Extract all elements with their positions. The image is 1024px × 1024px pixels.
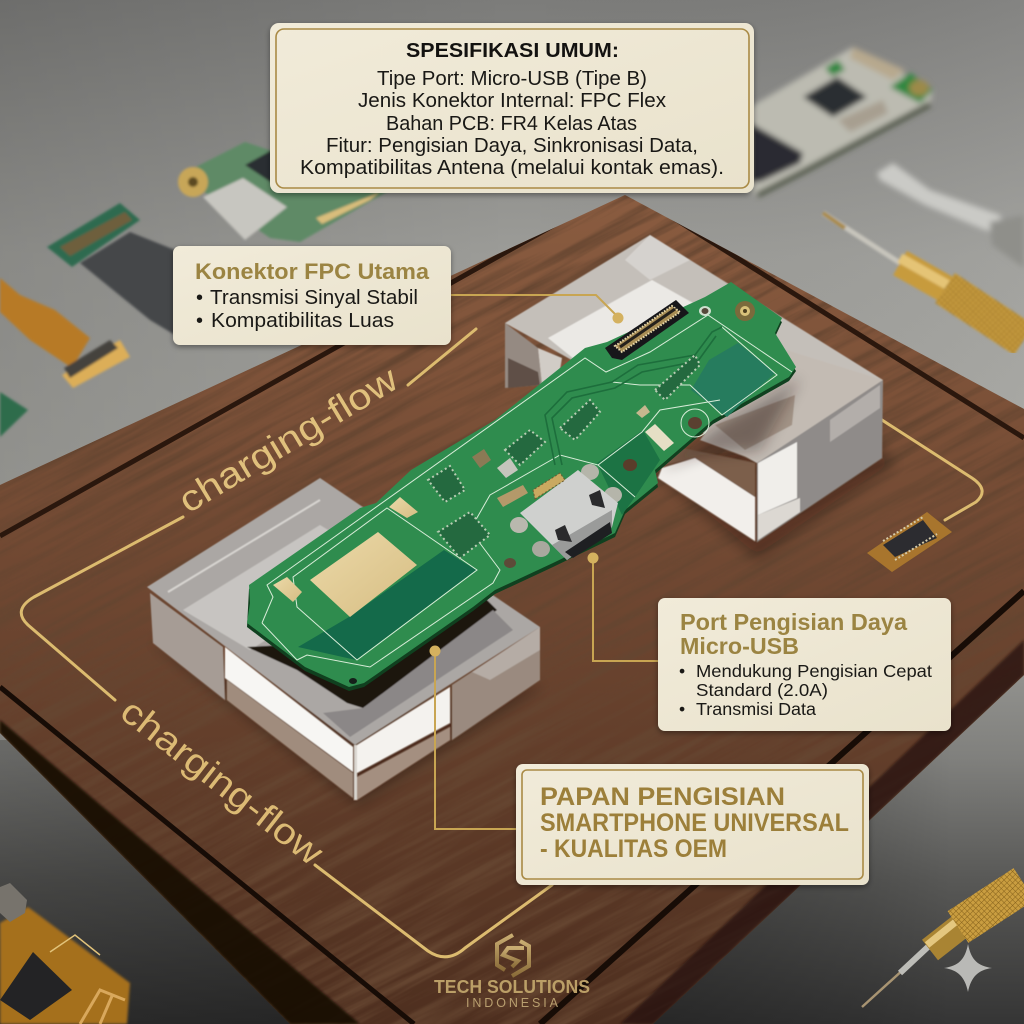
callout leader: micro-usb port: [588, 552, 658, 661]
port heading: [680, 609, 908, 659]
tool: silver screwdriver: [877, 163, 1024, 268]
gold circuit frame on the board: [21, 329, 982, 957]
product title text: [540, 783, 849, 863]
product title text: SMARTPHONE UNIVERSAL: [540, 809, 849, 837]
gold pad large: [310, 532, 417, 617]
port bullet list: •: [679, 699, 685, 719]
acrylic block right: [505, 235, 895, 560]
spec line compatibility: Kompatibilitas Antena (melalui kontak emas).: [300, 156, 724, 179]
icon: sparkle watermark: [944, 944, 992, 992]
board edge thickness: [247, 286, 796, 691]
port bullet list: •: [679, 661, 685, 681]
company name: TECH SOLUTIONS: [434, 977, 590, 997]
fpc bullet one: Transmisi Sinyal Stabil: [210, 287, 418, 309]
solder pad clusters: [428, 355, 700, 558]
small fpc connector at right: [867, 512, 952, 572]
rf connector: [735, 301, 755, 321]
charging-flow label bottom: charging-flow: [113, 690, 332, 874]
fpc bullet two: Kompatibilitas Luas: [211, 310, 394, 332]
port bullet list: [679, 661, 932, 719]
callout leader: fpc connector: [451, 295, 624, 324]
spec line port type: Tipe Port: Micro-USB (Tipe B): [377, 67, 647, 90]
spec line features: Fitur: Pengisian Daya, Sinkronisasi Data,: [326, 134, 698, 157]
blurred parts: dark fpc ribbon: [47, 203, 175, 335]
gold pad small right: [389, 497, 418, 518]
dark zone near hole: [597, 430, 660, 515]
port bullet list: Transmisi Data: [696, 699, 816, 719]
fpc bullet one: •: [196, 287, 203, 309]
icon: hexagon logo: [497, 935, 529, 976]
tool: gold screwdriver bottom right: [862, 884, 1024, 1007]
tool: gold screwdriver: [823, 213, 1024, 340]
circuit traces: [545, 327, 722, 465]
blurred parts: green board at left edge: [0, 392, 28, 437]
gold pad small left: [273, 577, 302, 602]
spec line connector: Jenis Konektor Internal: FPC Flex: [358, 89, 667, 112]
micro-usb port: [510, 464, 622, 560]
spec heading: SPESIFIKASI UMUM:: [406, 40, 619, 62]
product title text: PAPAN PENGISIAN: [540, 783, 785, 811]
silk outlines: [262, 315, 792, 667]
panel: product title: [516, 764, 869, 885]
port bullet list: Mendukung Pengisian Cepat: [696, 661, 932, 681]
company subtitle: INDONESIA: [466, 996, 559, 1010]
mounting holes: [349, 306, 711, 684]
fpc connector: [605, 300, 689, 360]
shadow of circuit board: [660, 378, 800, 470]
logo: tech solutions indonesia: [434, 935, 590, 1010]
dark copper zone left: [298, 550, 476, 660]
fpc bullet two: •: [196, 310, 203, 332]
flex circuit bottom left: [0, 883, 130, 1024]
callout leader: board: [430, 646, 516, 829]
panel: general specifications: [270, 23, 754, 193]
spec line pcb material: Bahan PCB: FR4 Kelas Atas: [386, 112, 637, 135]
panel: micro-usb charging port: [658, 598, 951, 731]
dark copper zone right: [691, 343, 775, 417]
acrylic block left: [147, 478, 545, 805]
port heading: Micro-USB: [680, 633, 799, 659]
small smd parts: [472, 405, 674, 507]
product title text: - KUALITAS OEM: [540, 835, 727, 863]
blurred parts: orange fpc ribbon: [0, 278, 130, 388]
panel: main fpc connector: [173, 246, 451, 345]
fpc heading: Konektor FPC Utama: [195, 259, 429, 284]
charging-flow label top: charging-flow: [171, 357, 406, 521]
port heading: Port Pengisian Daya: [680, 609, 908, 635]
blurred parts: usb board top left: [178, 142, 390, 242]
blurred parts: connector board top right: [745, 47, 933, 195]
port bullet list: Standard (2.0A): [696, 680, 828, 700]
board top: [247, 282, 796, 687]
green circuit board: [247, 282, 796, 691]
